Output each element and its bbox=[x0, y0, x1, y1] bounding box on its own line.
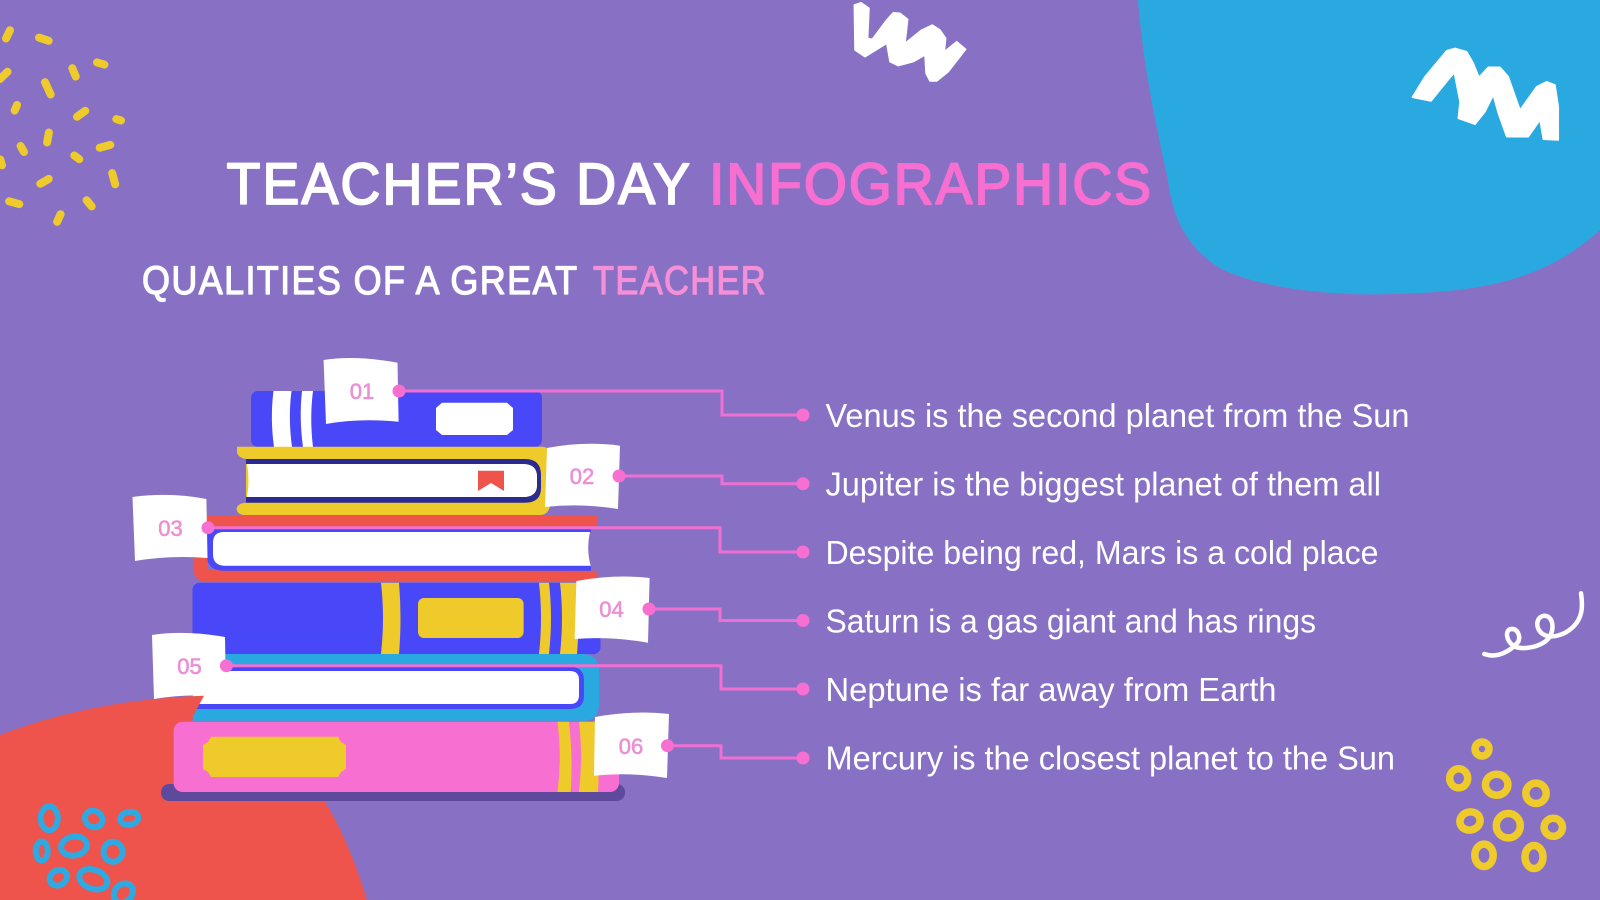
title bbox=[226, 152, 1153, 217]
connector 06 bbox=[661, 739, 810, 764]
subtitle: TEACHER bbox=[593, 259, 767, 303]
tag 06: 06 bbox=[619, 734, 643, 759]
text: item 5: Neptune is far away from Earth bbox=[826, 671, 1276, 708]
text: item 2: Jupiter is the biggest planet of them all bbox=[826, 466, 1381, 502]
connector 02 bbox=[612, 470, 810, 490]
icon: white scribble top centre bbox=[854, 3, 966, 81]
connector 01 bbox=[392, 384, 810, 422]
tag 03: 03 bbox=[158, 516, 183, 541]
text: item 3: Despite being red, Mars is a cold place bbox=[826, 534, 1378, 571]
tag 05 bbox=[152, 633, 226, 699]
text: item 4: Saturn is a gas giant and has rings bbox=[826, 602, 1316, 640]
tag 04 bbox=[575, 577, 650, 643]
connector 05 bbox=[220, 659, 809, 696]
book 4: blue with yellow bands bbox=[192, 583, 600, 654]
blob: red bottom left bbox=[0, 696, 367, 900]
tag 02: 02 bbox=[570, 464, 594, 489]
book 5: cyan cover with pages bbox=[193, 654, 599, 721]
tag 02 bbox=[545, 444, 620, 509]
icon: white curl right bbox=[1484, 593, 1582, 655]
book 6: pink with yellow label and shadow bbox=[161, 722, 625, 801]
blob: cyan top right bbox=[1138, 0, 1600, 294]
decoration: yellow rings bottom right bbox=[1450, 742, 1563, 868]
book 1: blue with white stripes bbox=[251, 391, 542, 447]
decoration: blue rings on red blob bbox=[36, 806, 139, 900]
text: item 6: Mercury is the closest planet to the Sun bbox=[826, 740, 1395, 776]
tag 04: 04 bbox=[599, 597, 624, 622]
tag 05: 05 bbox=[177, 654, 202, 679]
tag 06 bbox=[594, 713, 669, 778]
subtitle: QUALITIES OF A GREAT bbox=[142, 259, 578, 303]
title: TEACHER’S DAY bbox=[226, 152, 692, 217]
tag 03 bbox=[132, 495, 208, 561]
tag 01: 01 bbox=[350, 379, 374, 404]
book 3: red cover with pages bbox=[193, 515, 598, 582]
connector 03 bbox=[202, 521, 810, 558]
text: item 1: Venus is the second planet from the Sun bbox=[826, 397, 1410, 434]
tag 01 bbox=[324, 358, 399, 424]
icon: white scribble on cyan blob bbox=[1412, 48, 1558, 140]
title: INFOGRAPHICS bbox=[709, 152, 1153, 217]
decoration: yellow confetti top left bbox=[0, 30, 121, 222]
book 2: yellow cover with pages bbox=[237, 447, 550, 515]
connector 04 bbox=[642, 602, 810, 627]
